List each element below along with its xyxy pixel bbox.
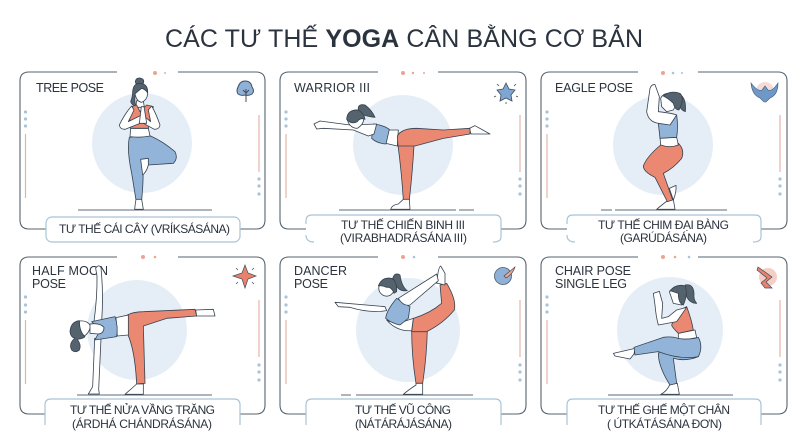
panel: half moon pose	[20, 255, 265, 431]
caption: half moon pose: TƯ THẾ NỬA VẦNG TRĂNG	[70, 402, 215, 417]
heading: dancer pose: DANCER	[294, 264, 347, 278]
caption: half moon pose: (ÁRDHÁ CHÁNDRÁSÁNA)	[72, 416, 212, 431]
caption: tree pose: TƯ THẾ CÁI CÂY (VRÍKSÁSÁNA)	[59, 221, 230, 236]
figure: chair pose single leg	[613, 285, 701, 394]
figure: eagle pose	[643, 85, 686, 209]
caption: warrior III	[306, 215, 501, 245]
icon: tree	[237, 81, 254, 102]
caption: half moon pose	[45, 399, 240, 431]
caption: eagle pose: TƯ THẾ CHIM ĐẠI BÀNG	[598, 217, 729, 232]
heading: warrior III: WARRIOR III	[294, 81, 370, 95]
heading: dancer pose: POSE	[294, 277, 328, 291]
heading: eagle pose: EAGLE POSE	[555, 81, 633, 95]
panel: tree pose	[20, 71, 265, 242]
panel: dancer pose	[280, 255, 526, 431]
figure: tree pose	[119, 78, 176, 209]
heading: half moon pose: HALF MOON	[32, 264, 108, 278]
icon: chair pose	[757, 267, 777, 288]
figure: half moon pose	[70, 266, 215, 394]
panel: warrior III	[280, 71, 526, 245]
figure: warrior III	[314, 105, 490, 209]
caption: chair pose single leg: ( ÚTKÁTÁSÁNA ĐƠN)	[607, 416, 722, 431]
caption: chair pose single leg: TƯ THẾ GHẾ MỘT CHÂN	[598, 402, 730, 417]
icon: four-point star	[233, 265, 256, 288]
caption: eagle pose	[567, 215, 761, 245]
caption: dancer pose: TƯ THẾ VŨ CÔNG	[355, 402, 451, 417]
heading: tree pose: TREE POSE	[36, 81, 104, 95]
heading: half moon pose	[32, 264, 108, 291]
caption: chair pose single leg	[567, 399, 761, 431]
icon: eagle	[751, 82, 778, 102]
figure: dancer pose	[335, 266, 455, 394]
heading: chair pose single leg: SINGLE LEG	[555, 277, 627, 291]
caption: dancer pose	[306, 399, 501, 431]
caption: warrior III: TƯ THẾ CHIẾN BINH III	[341, 217, 465, 232]
heading: half moon pose: POSE	[32, 277, 66, 291]
caption: eagle pose: (GARÚDÁSÁNA)	[620, 230, 707, 245]
heading: dancer pose	[294, 264, 347, 291]
icon: star	[494, 83, 518, 104]
caption: warrior III: (VIRABHADRÁSÁNA III)	[340, 230, 467, 245]
panel: eagle pose	[541, 71, 787, 245]
caption: dancer pose: (NÁTÁRÁJÁSÁNA)	[355, 416, 452, 431]
heading: chair pose single leg	[555, 264, 631, 291]
title: CÁC TƯ THẾ YOGA CÂN BẰNG CƠ BẢN	[165, 23, 643, 53]
panel: chair pose single leg	[541, 255, 787, 431]
caption: tree pose	[46, 217, 240, 242]
heading: chair pose single leg: CHAIR POSE	[555, 264, 631, 278]
icon: feather badge	[494, 267, 515, 284]
